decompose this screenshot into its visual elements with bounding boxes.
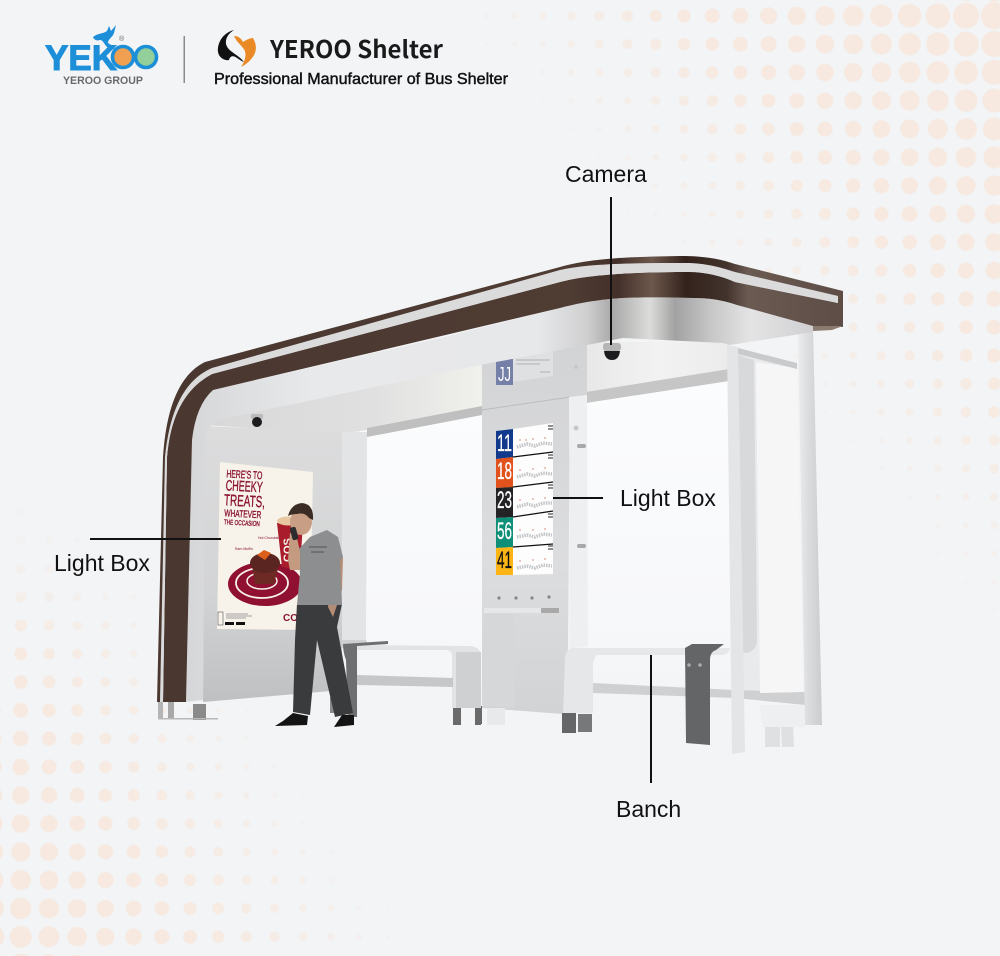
main camera — [603, 343, 621, 360]
halftone dots top right — [512, 0, 1000, 556]
left wall — [203, 426, 342, 702]
icon: orange ring — [112, 46, 134, 68]
logo: YEKOO group — [45, 25, 156, 87]
tagline: Professional Manufacturer of Bus Shelter — [214, 71, 509, 88]
light box: timetable: 41 — [497, 547, 512, 574]
light box: timetable: 11 — [497, 430, 512, 457]
rear beam left — [367, 406, 482, 437]
poster footer — [218, 612, 298, 625]
light box: timetable: 56 — [497, 518, 512, 545]
ceiling left — [205, 364, 482, 434]
label: Camera: Camera — [565, 161, 647, 187]
halftone dots bottom left — [0, 564, 362, 956]
person shoes — [275, 713, 354, 727]
poster muffin — [250, 550, 280, 584]
canopy fascia — [186, 297, 813, 702]
label: Light Box left: Light Box — [54, 550, 150, 576]
person on phone — [275, 503, 354, 727]
person torso — [297, 530, 343, 605]
person legs — [293, 604, 353, 717]
totem side panel — [569, 395, 588, 648]
rear glass right — [586, 372, 730, 700]
group name: YEROO GROUP — [63, 75, 143, 87]
right glass panel — [738, 348, 805, 747]
person hair — [288, 503, 313, 520]
icon: orange wing — [234, 36, 256, 67]
poster footer: CO — [283, 613, 298, 624]
registered mark: ® — [119, 35, 125, 43]
left bench — [343, 641, 481, 725]
poster headline: CHEEKY — [225, 477, 263, 496]
canopy underside end — [813, 326, 843, 331]
secondary camera — [251, 414, 263, 427]
shelf with pegs — [484, 595, 559, 613]
icon: blue dragon — [93, 25, 116, 49]
feet: left wall — [158, 697, 343, 720]
canopy silver strip — [160, 263, 838, 702]
bus shelter — [157, 256, 843, 754]
central totem — [475, 342, 588, 725]
person phone — [290, 526, 299, 541]
icon: green ring — [136, 46, 156, 68]
right bench end block — [760, 705, 805, 727]
person head — [290, 509, 312, 535]
rear post lower — [342, 640, 370, 648]
poster plate — [228, 562, 302, 606]
poster: light box — [217, 462, 313, 630]
route sign — [496, 351, 553, 386]
rear glass left — [360, 405, 482, 700]
brand name: YEROO Shelter — [269, 30, 444, 65]
person left arm — [288, 533, 300, 570]
poster cup — [277, 516, 303, 570]
totem face — [482, 342, 587, 714]
poster small labels — [235, 536, 279, 550]
poster headline: THE OCCASION — [224, 519, 260, 528]
poster cup: COS — [282, 538, 294, 562]
totem feet — [475, 706, 505, 725]
totem lower taper — [482, 614, 516, 708]
totem divider — [482, 397, 570, 410]
canopy lower brown band — [163, 272, 843, 702]
light box: timetable — [496, 423, 553, 575]
poster small labels: Ram Muffin — [235, 547, 253, 551]
poster headline: TREATS, — [224, 492, 265, 511]
shirt print — [309, 547, 327, 552]
right bench — [562, 644, 805, 745]
poster headline: WHATEVER — [224, 508, 262, 521]
rear beam right — [586, 369, 729, 403]
poster headline: HERE'S TO — [226, 468, 263, 482]
logo divider — [184, 36, 185, 83]
label: Light Box right: Light Box — [620, 485, 716, 511]
person right arm — [328, 557, 343, 617]
light box: timetable: 23 — [497, 487, 512, 514]
rear post — [342, 432, 367, 640]
right outer post — [798, 326, 822, 725]
wordmark YEK: YEK — [45, 39, 117, 78]
canopy upper brown band — [157, 256, 843, 702]
poster small labels: Hot Chocolate — [258, 536, 280, 540]
light box: timetable: 18 — [497, 458, 512, 485]
route sign: JJ — [498, 364, 511, 386]
poster headline — [224, 470, 264, 526]
totem pegs — [574, 365, 586, 548]
right frame post — [727, 345, 745, 754]
ceiling right — [586, 342, 730, 396]
label: Banch: Banch — [616, 796, 681, 822]
logo: YEROO Shelter — [214, 30, 509, 88]
icon: black crescent — [218, 30, 244, 62]
